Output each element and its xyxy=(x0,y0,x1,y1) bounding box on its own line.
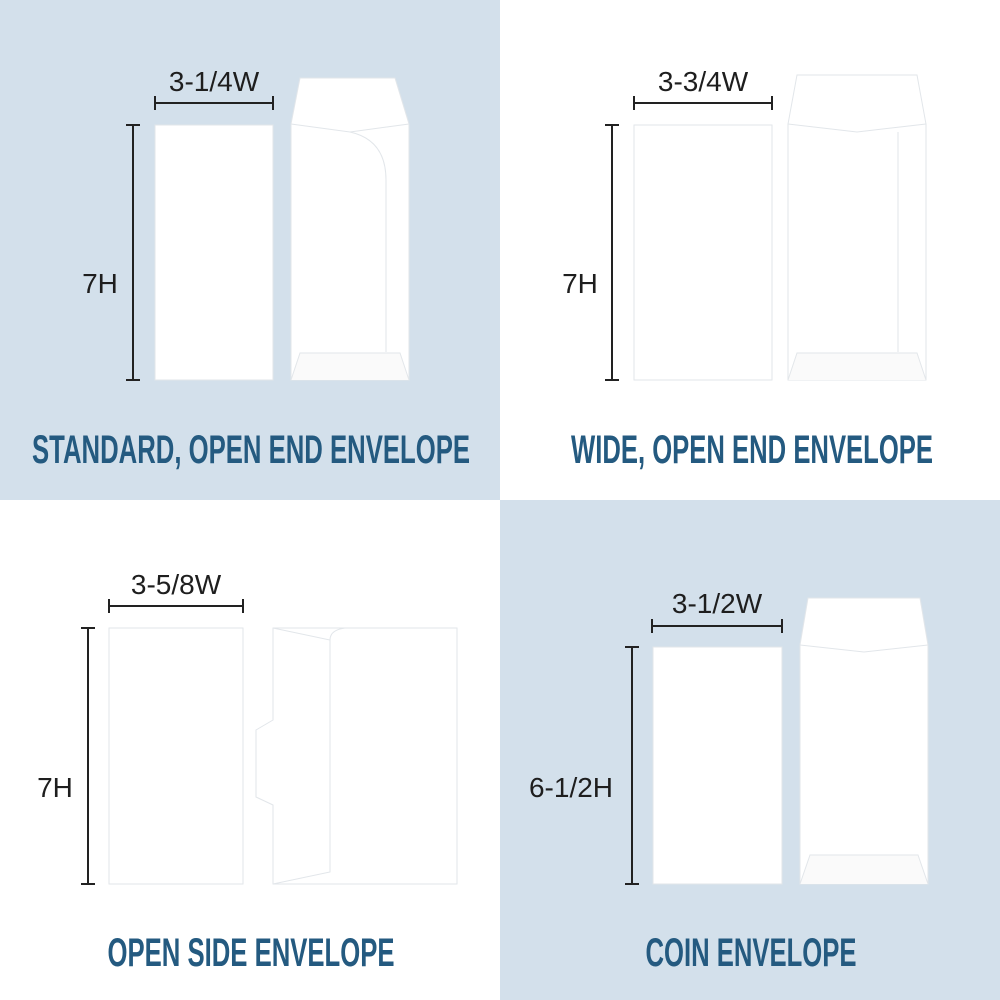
envelope back side-open xyxy=(256,628,457,884)
envelope back with flap xyxy=(291,78,409,380)
width dimension 3-3/4W: 3-3/4W xyxy=(658,66,749,97)
width dimension 3-5/8W: 3-5/8W xyxy=(131,569,222,600)
width dimension 3-1/2W: 3-1/2W xyxy=(672,588,763,619)
height dimension 6-1/2H xyxy=(529,647,639,884)
envelope front xyxy=(155,125,273,380)
envelope front xyxy=(109,628,243,884)
height dimension 7H: 7H xyxy=(562,268,598,299)
panel: wide open end xyxy=(562,66,933,472)
width dimension 3-1/4W: 3-1/4W xyxy=(169,66,260,97)
panel: standard open end xyxy=(32,66,470,472)
width dimension 3-3/4W xyxy=(634,66,772,110)
height dimension 7H xyxy=(82,125,140,380)
panel: open side xyxy=(37,569,457,975)
height dimension 7H: 7H xyxy=(37,772,73,803)
panel: open side background xyxy=(0,500,500,1000)
envelope back with flap xyxy=(788,75,926,380)
title: COIN ENVELOPE xyxy=(646,931,856,975)
panel: coin envelope xyxy=(529,588,928,975)
title: STANDARD, OPEN END ENVELOPE xyxy=(32,428,470,472)
height dimension 7H: 7H xyxy=(82,268,118,299)
width dimension 3-5/8W xyxy=(109,569,243,613)
envelope front xyxy=(653,647,782,884)
width dimension 3-1/4W xyxy=(155,66,273,110)
envelope front xyxy=(634,125,772,380)
panel: wide open end background xyxy=(500,0,1000,500)
envelope back with flap xyxy=(800,598,928,884)
height dimension 7H xyxy=(37,628,95,884)
panel: coin envelope background xyxy=(500,500,1000,1000)
height dimension 6-1/2H: 6-1/2H xyxy=(529,772,613,803)
panel: standard open end background xyxy=(0,0,500,500)
width dimension 3-1/2W xyxy=(652,588,782,633)
title: OPEN SIDE ENVELOPE xyxy=(108,931,394,975)
height dimension 7H xyxy=(562,125,619,380)
